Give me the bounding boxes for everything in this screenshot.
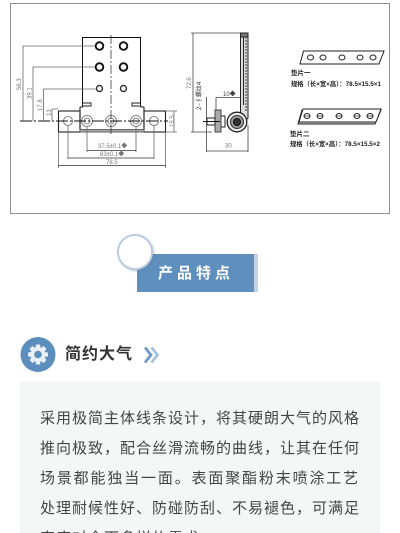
dimension labels, front view: 39.1 [28,87,34,99]
dimension labels, front view: 37.5±0.1◆ [98,143,127,150]
dimension labels, front view: 56.3 [17,78,23,90]
dimension lines, front view [23,46,177,168]
icon: gear [20,337,56,372]
spacer one: 垫片一 [291,68,311,77]
dimension labels, side view [187,77,236,150]
description line 1: 采用极简主体线条设计，将其硬朗大气的风格 [40,410,360,427]
dimension labels, front view: 15.5 [170,115,176,127]
description line 2: 推向极致，配合丝滑流畅的曲线，让其在任何 [40,440,360,457]
side view of hinge [191,33,248,152]
banner heading: 产品特点 [158,265,234,282]
heading: simple and elegant: 简约大气 [65,346,133,363]
dimension labels, front view: 17.8 [38,99,44,111]
icon: double chevron [144,346,160,364]
banner side strip [254,254,258,292]
spacer two: 规格（长×宽×高）：78.5×15.5×2 [290,139,380,148]
description line 4: 处理耐候性好、防碰防刮、不易褪色，可满足 [40,500,360,517]
dimension labels, side view: 72.6 [187,77,193,89]
dimension labels, front view: 13 [47,109,53,116]
spacer two [290,109,381,148]
dimension labels, front view: 78.5 [106,160,118,166]
panel: description text [20,382,380,533]
banner bar [137,254,254,292]
dimension labels, front view: 63±0.1◆ [100,151,124,158]
banner ring [117,234,153,270]
dimension labels, side view: 2−∮螺纹4 [195,81,203,110]
spacer two: 垫片二 [290,129,310,138]
front view of hinge [20,35,168,134]
banner: product features [116,234,258,292]
spacer one: 规格（长×宽×高）：78.5×15.5×1 [291,79,381,88]
dimension labels, side view: 30 [225,144,232,150]
panel: technical drawing [10,3,390,214]
description line 3: 场景都能独当一面。表面聚酯粉末喷涂工艺 [40,470,360,487]
dimension labels, front view [17,78,176,166]
dimension labels, side view: 10◆ [223,91,236,98]
spacer one [291,51,384,88]
